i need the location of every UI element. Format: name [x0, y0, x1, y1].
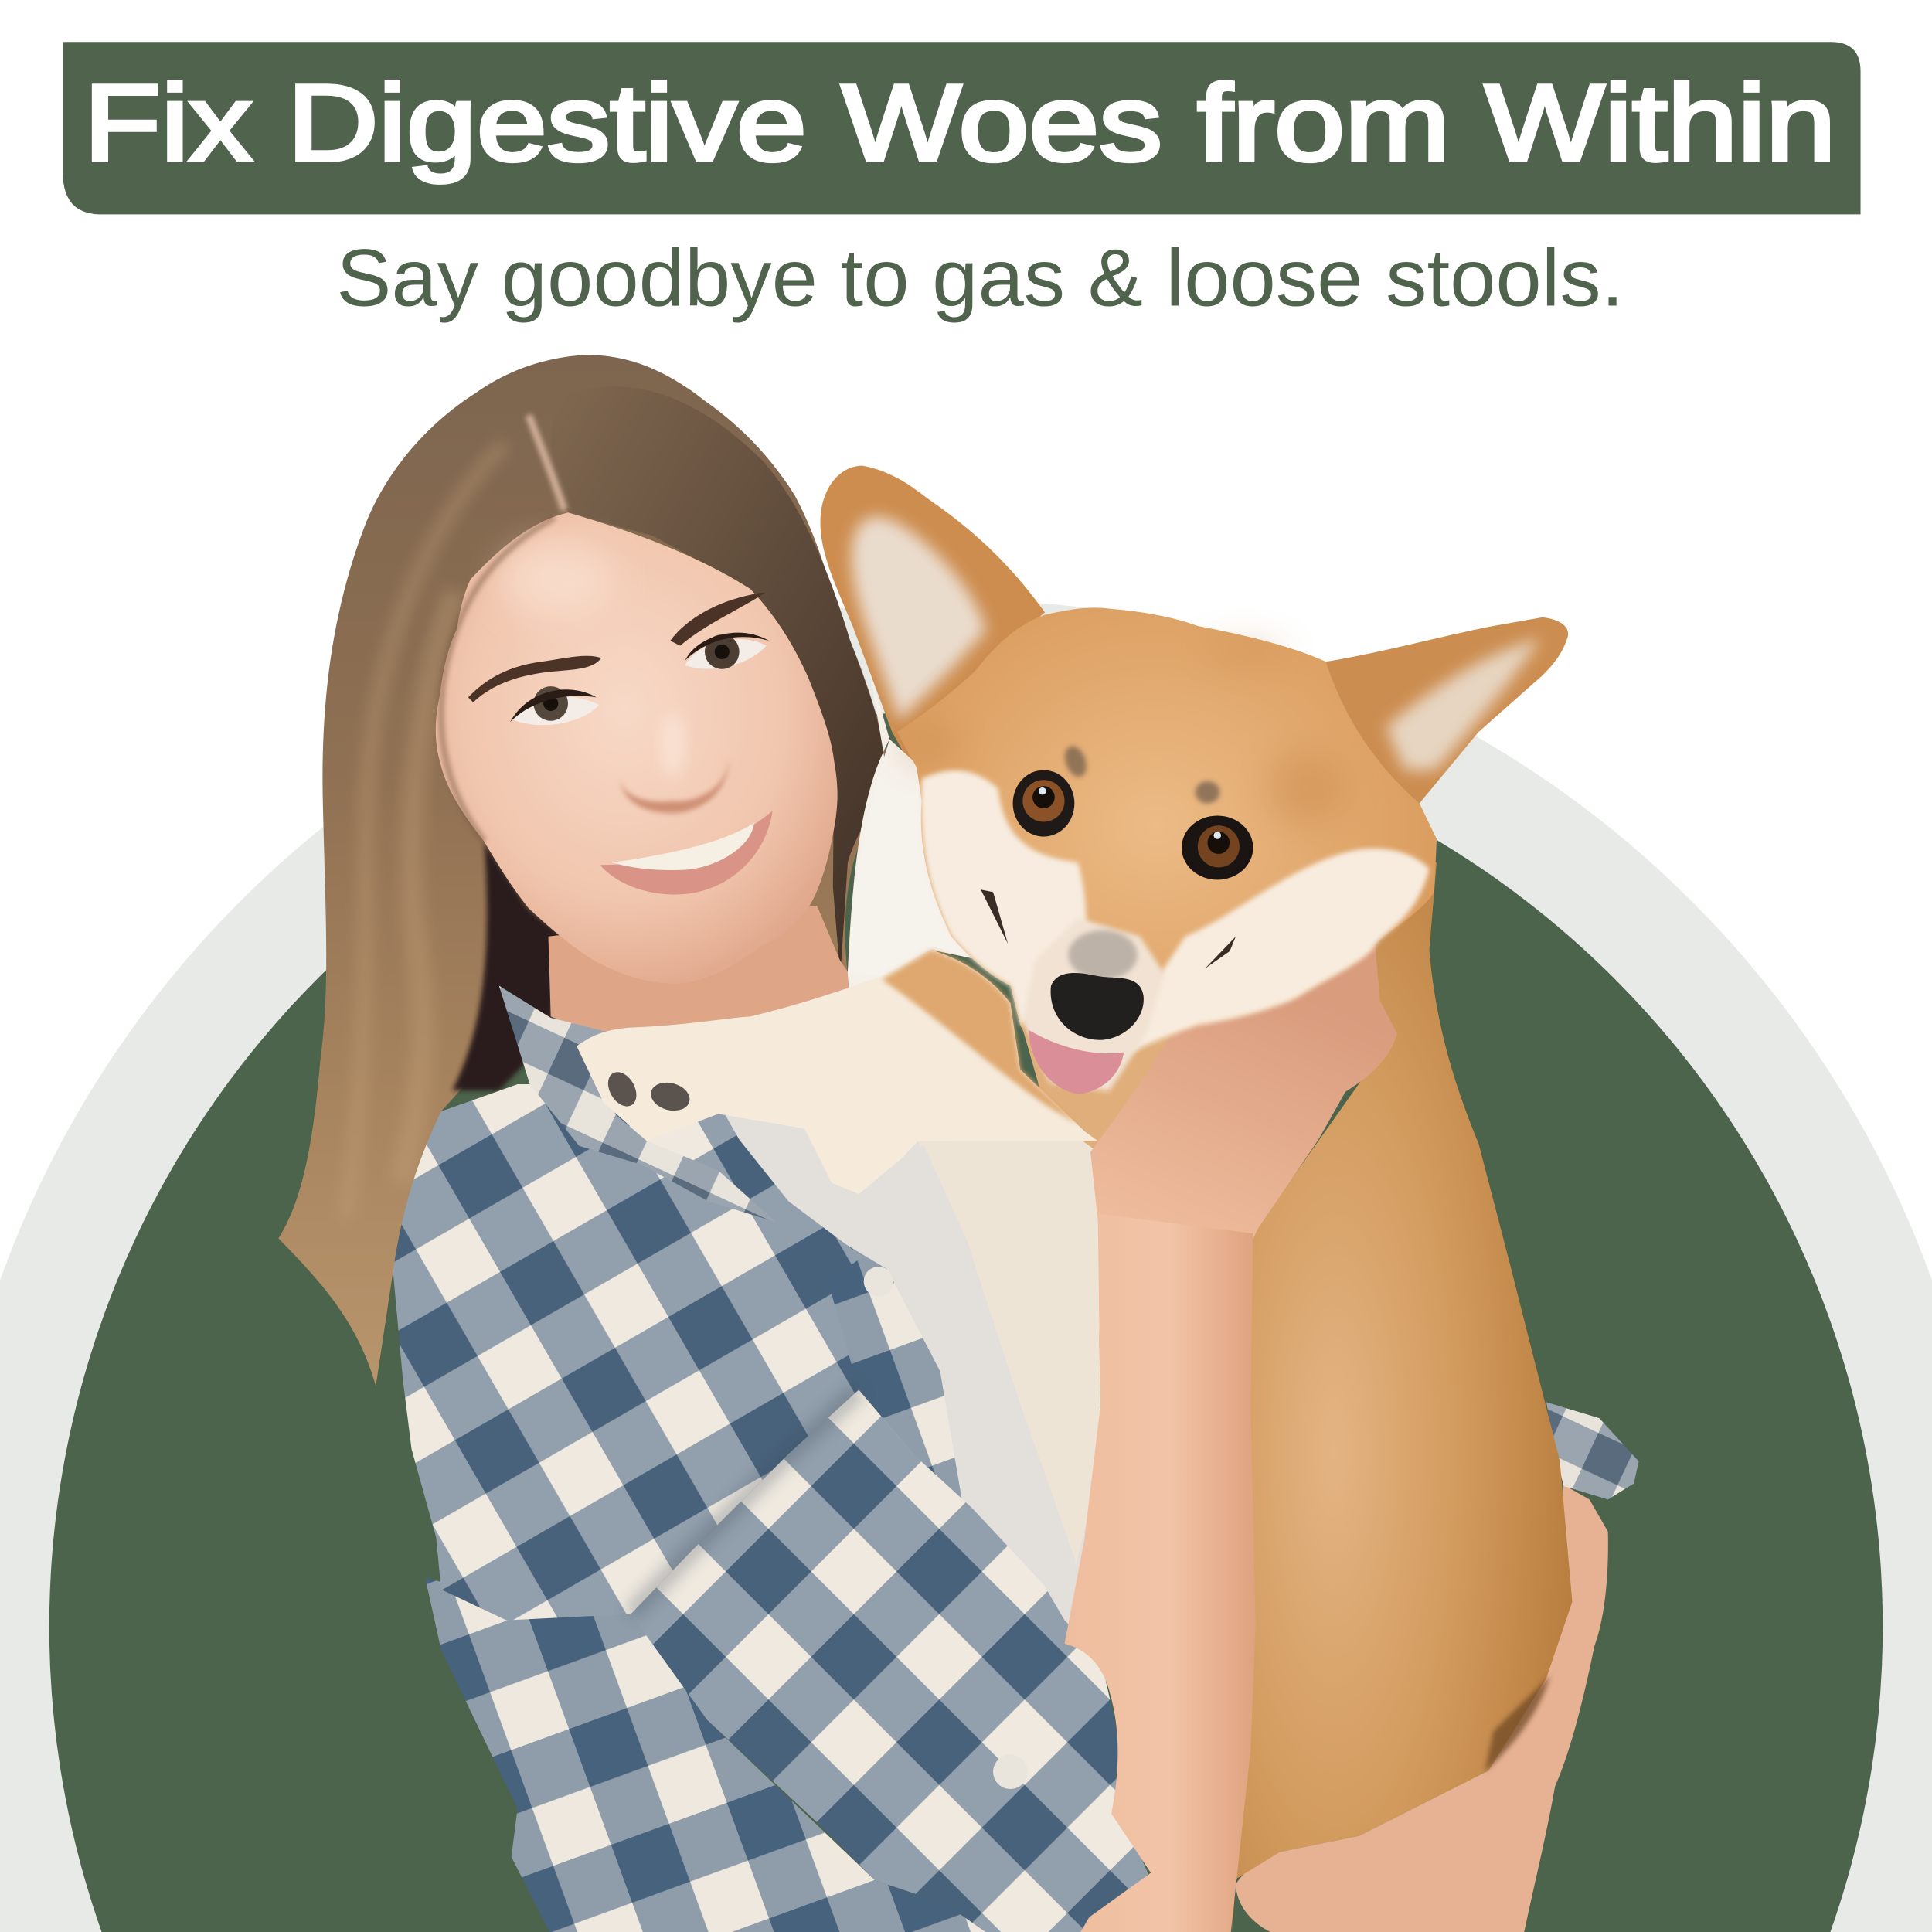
woman: hair shadow along cheek — [441, 518, 554, 842]
woman: plaid upper sleeve — [393, 1084, 862, 1621]
dog: raised front leg — [577, 950, 1098, 1194]
woman: right eye — [685, 633, 769, 669]
woman: sleeve fold shading — [631, 1389, 859, 1614]
woman: face — [436, 512, 838, 984]
dog: body — [1232, 862, 1572, 1932]
title banner — [63, 42, 1861, 214]
dog: neck fur under chin — [1010, 986, 1232, 1152]
woman: far sleeve cuff — [1546, 1402, 1639, 1499]
dog: right ear — [1326, 617, 1568, 804]
dog: muzzle tip fur — [1022, 918, 1165, 1092]
woman: shirt button — [864, 1267, 893, 1296]
woman: right eyebrow — [670, 593, 765, 645]
background circle: outer light ring — [0, 600, 1932, 1932]
woman: nose — [620, 758, 730, 813]
woman: neck — [549, 906, 862, 1041]
woman: shirt underlay filling gaps — [616, 1097, 1100, 1657]
dog: orange patch on leg — [883, 950, 1078, 1124]
woman: white inner shirt — [719, 1126, 1076, 1614]
subtitle: Say goodbye to gas & loose stools. — [336, 233, 1624, 323]
dog: left white muzzle — [921, 770, 1086, 1026]
dog: left eye — [1013, 770, 1074, 837]
dog: mouth corners — [981, 889, 1236, 968]
woman: shadow under chin — [452, 842, 595, 1090]
woman: left eye — [510, 686, 599, 725]
woman: far arm and lower hand — [1236, 1485, 1608, 1932]
woman: plaid chest placket — [764, 1183, 964, 1509]
woman: plaid shirt torso — [425, 1577, 986, 1932]
woman: plaid forearm sleeve — [631, 1389, 1148, 1932]
dog: left ear — [821, 466, 1045, 776]
woman: hair highlights — [345, 444, 505, 1219]
dog: white chest — [848, 665, 1100, 1565]
woman: left eyebrow — [468, 656, 601, 702]
dog: head — [897, 607, 1437, 1092]
dog: nose bridge shading — [1068, 930, 1138, 980]
dog: tongue — [1029, 1030, 1124, 1094]
woman: forehead highlight — [502, 543, 612, 616]
woman: nose highlight — [661, 713, 685, 777]
woman: front forearm — [1065, 1213, 1256, 1932]
dog: white neck ruff — [848, 740, 986, 976]
woman: smile — [600, 811, 773, 895]
dog: paw pads — [602, 1067, 693, 1115]
woman: cuff button — [993, 1754, 1028, 1789]
woman: hair part — [529, 415, 564, 510]
dog: darker fur patches — [902, 643, 1345, 825]
woman: dark right side of hair — [551, 386, 884, 976]
dog: nose — [1051, 973, 1144, 1040]
woman: hand on dog — [1090, 924, 1397, 1269]
dog: right eye — [1182, 815, 1253, 879]
woman: back hair — [278, 355, 886, 1386]
dog: eyebrow marks — [1061, 743, 1219, 804]
dog: dark shadow at rump — [1485, 1675, 1550, 1772]
woman: shirt collar — [499, 986, 776, 1223]
photo: woman holding corgi — [278, 355, 1639, 1932]
background circle: inner green — [49, 710, 1883, 1932]
dog: cream chest fur — [918, 1141, 1100, 1565]
dog: right white cheek — [1124, 849, 1429, 1056]
title text: Fix Digestive Woes from Within — [83, 62, 1836, 183]
